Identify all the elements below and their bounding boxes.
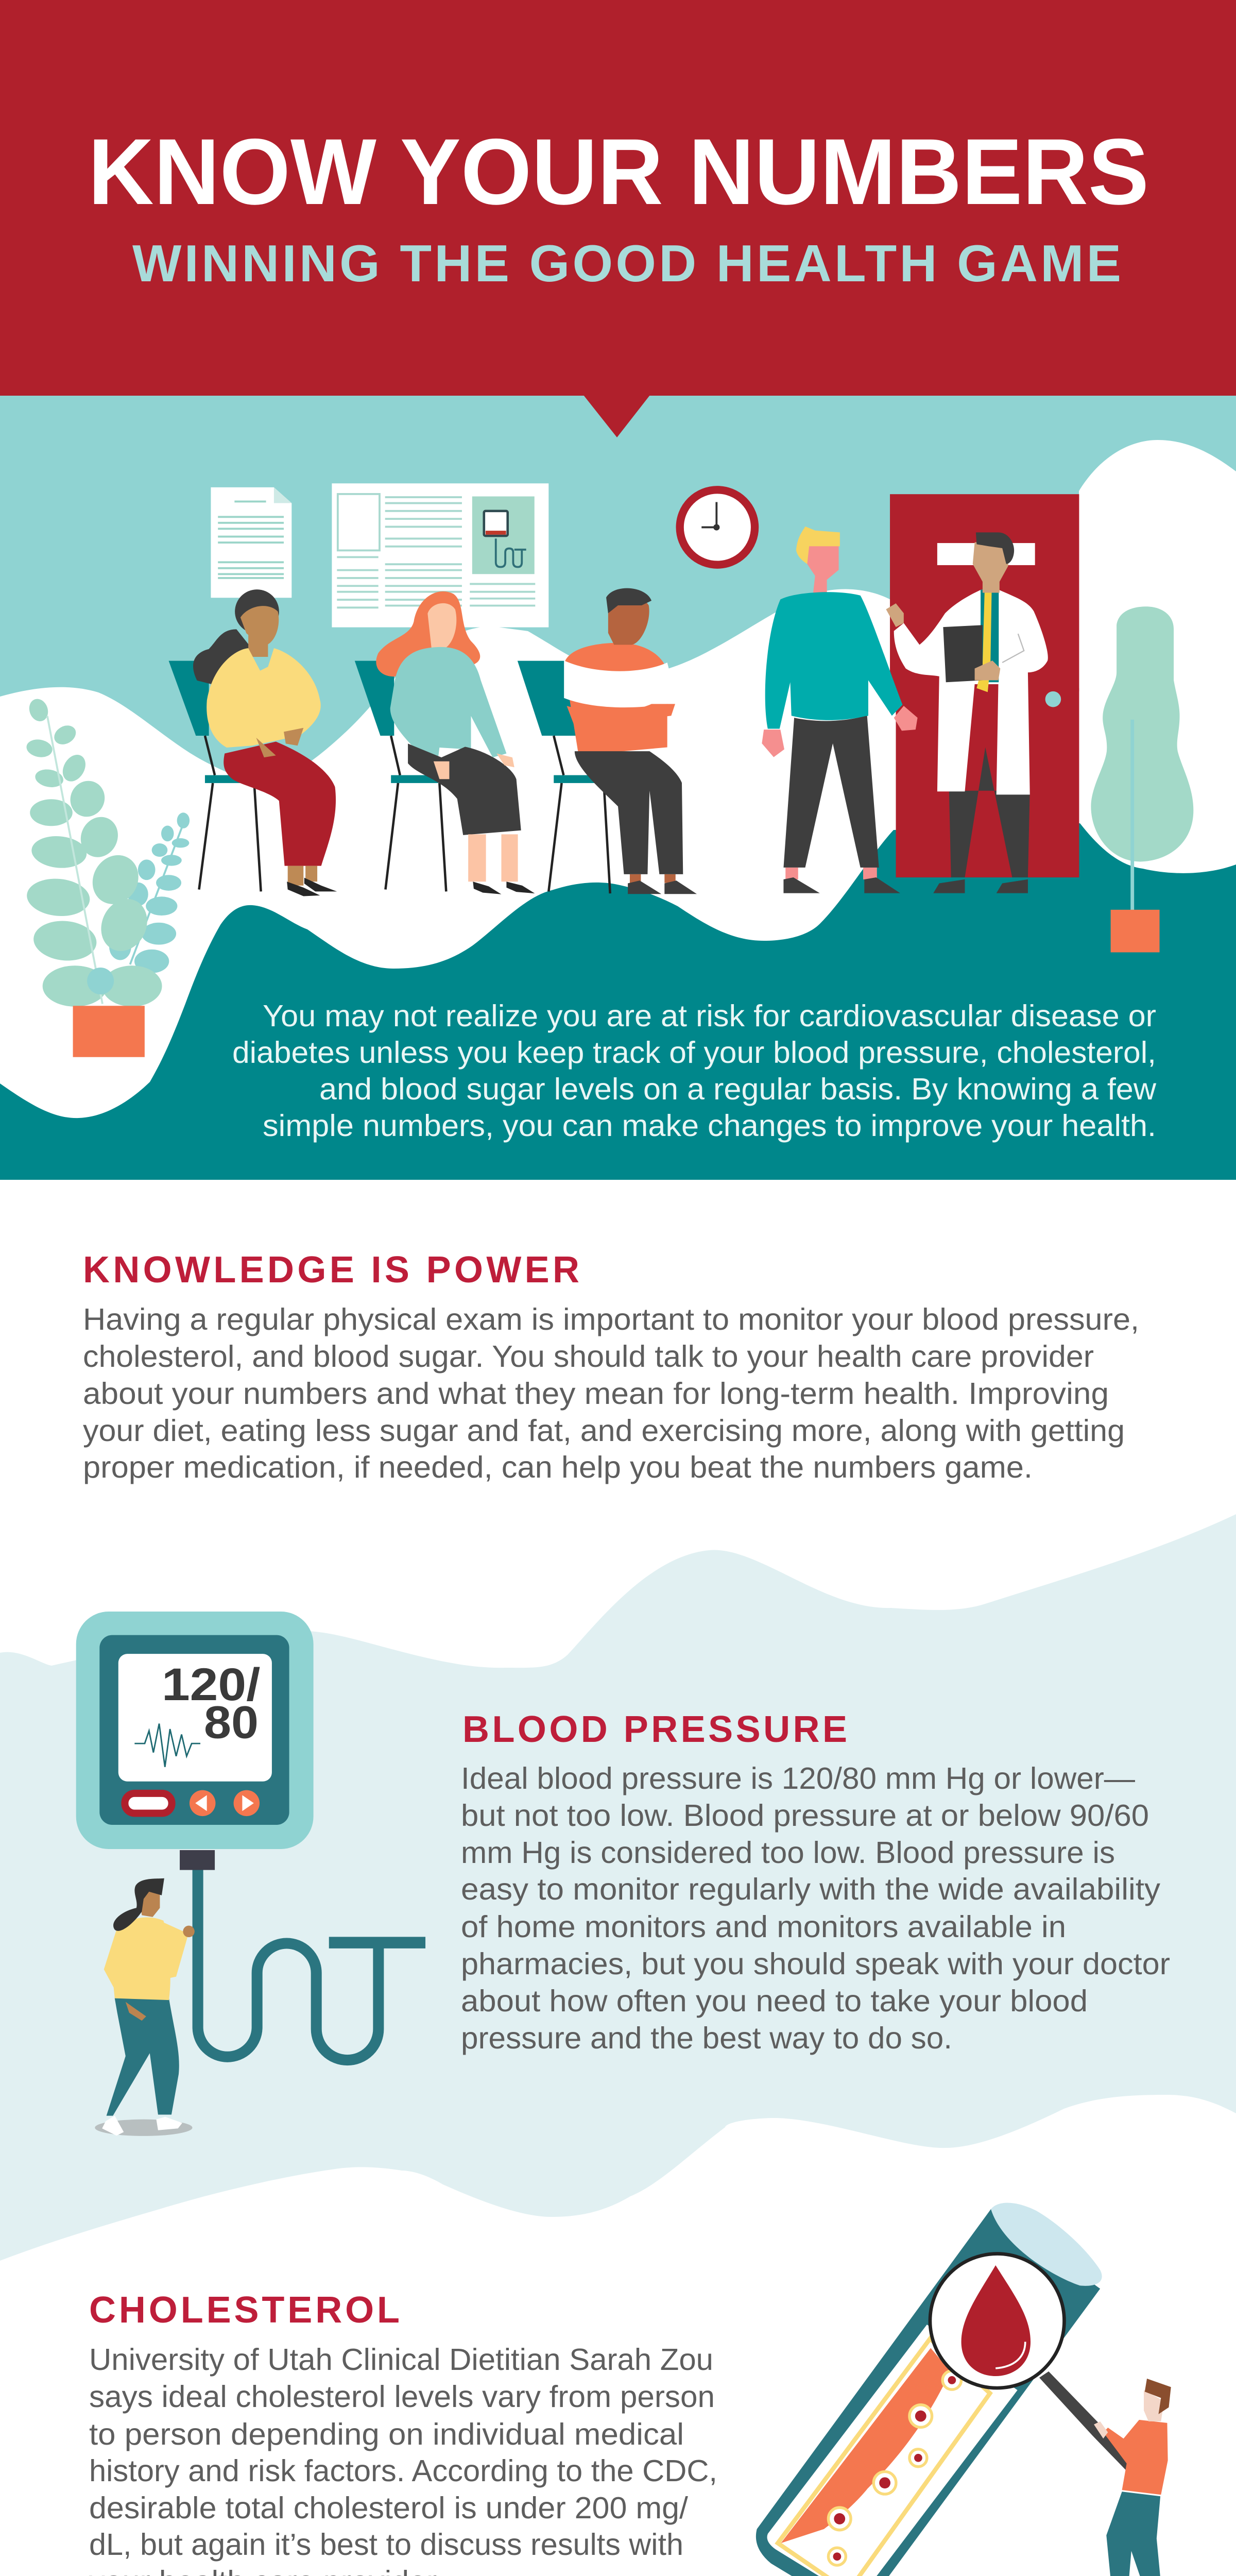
icon: clock xyxy=(680,490,755,565)
text block: knowledge is power: your diet, eating less sugar and fat, and exercising more, along with getting xyxy=(83,1414,1125,1448)
text block: cholesterol xyxy=(89,2343,717,2576)
text block: blood pressure: pharmacies, but you should speak with your doctor xyxy=(461,1947,1170,1981)
text block: cholesterol: to person depending on individual medical xyxy=(89,2417,684,2451)
icon: monitor: 80 xyxy=(204,1697,259,1748)
icon: wall poster xyxy=(332,483,548,628)
illustration: cholesterol test tube and magnifier xyxy=(756,2203,1186,2576)
text block: cholesterol: dL, but again it’s best to discuss results with xyxy=(89,2528,683,2562)
person: doctor xyxy=(886,532,1048,893)
text block: cholesterol: University of Utah Clinical Dietitian Sarah Zou xyxy=(89,2343,713,2377)
text block: hero intro: and blood sugar levels on a regular basis. By knowing a few xyxy=(319,1072,1156,1106)
text block: hero intro: simple numbers, you can make changes to improve your health. xyxy=(263,1109,1156,1143)
text block: blood pressure: easy to monitor regularly with the wide availability xyxy=(461,1872,1161,1906)
icon: wall document xyxy=(211,487,291,598)
person: woman in yellow seated xyxy=(169,589,337,896)
panel: hero background xyxy=(0,396,1236,1180)
icon: magnifier with blood drop xyxy=(930,2253,1139,2482)
illustration: plant left xyxy=(25,696,190,1057)
text block: hero intro: diabetes unless you keep track of your blood pressure, cholesterol, xyxy=(232,1036,1156,1070)
person: third chair xyxy=(518,661,610,893)
person: woman with monitor xyxy=(95,1878,195,2136)
text block: cholesterol: says ideal cholesterol levels vary from person xyxy=(89,2380,715,2414)
illustration: plant right xyxy=(1091,606,1193,952)
illustration: blood pressure monitor xyxy=(76,1612,425,2136)
icon: monitor xyxy=(76,1612,314,1870)
heading: blood pressure: BLOOD PRESSURE xyxy=(462,1709,847,1750)
text block: knowledge is power: about your numbers and what they mean for long-term health. Improving xyxy=(83,1377,1109,1411)
panel: door xyxy=(890,494,1079,877)
text block: blood pressure: of home monitors and monitors available in xyxy=(461,1910,1066,1944)
text block: blood pressure xyxy=(461,1761,1170,2055)
person: man in orange seated xyxy=(564,588,697,894)
person: man with magnifier xyxy=(1080,2379,1186,2576)
title: KNOW YOUR NUMBERS xyxy=(88,119,1149,224)
illustration: waiting room right xyxy=(564,490,1193,952)
subtitle: WINNING THE GOOD HEALTH GAME xyxy=(132,235,1121,293)
text block: blood pressure: Ideal blood pressure is 120/80 mm Hg or lower— xyxy=(461,1761,1135,1795)
tube xyxy=(198,1868,425,2060)
text block: blood pressure: about how often you need to take your blood xyxy=(461,1984,1088,2018)
text block: knowledge is power xyxy=(83,1302,1139,1484)
panel: blood pressure wave background xyxy=(0,1514,1236,2261)
text block: hero intro: You may not realize you are at risk for cardiovascular disease or xyxy=(263,999,1156,1033)
text block: blood pressure: but not too low. Blood pressure at or below 90/60 xyxy=(461,1799,1149,1833)
text block: knowledge is power: proper medication, if needed, can help you beat the numbers game. xyxy=(83,1450,1033,1484)
person: man in teal standing xyxy=(762,527,918,893)
text block: knowledge is power: Having a regular physical exam is important to monitor your blood pressure, xyxy=(83,1302,1139,1336)
illustration: waiting room left xyxy=(25,483,610,1057)
text block: hero intro xyxy=(232,999,1156,1143)
text block: knowledge is power: cholesterol, and blood sugar. You should talk to your health care provider xyxy=(83,1340,1094,1374)
text block: blood pressure: mm Hg is considered too low. Blood pressure is xyxy=(461,1836,1115,1870)
text block: cholesterol: desirable total cholesterol is under 200 mg/ xyxy=(89,2491,689,2525)
icon: test tube xyxy=(756,2203,1102,2576)
heading: knowledge is power: KNOWLEDGE IS POWER xyxy=(83,1249,579,1291)
heading: cholesterol: CHOLESTEROL xyxy=(89,2290,400,2331)
icon: monitor: 120/ xyxy=(162,1658,260,1710)
text block: cholesterol: history and risk factors. According to the CDC, xyxy=(89,2454,717,2488)
panel: header banner xyxy=(0,0,1236,437)
person: woman in teal seated xyxy=(355,591,535,894)
text block: blood pressure: pressure and the best way to do so. xyxy=(461,2021,952,2055)
